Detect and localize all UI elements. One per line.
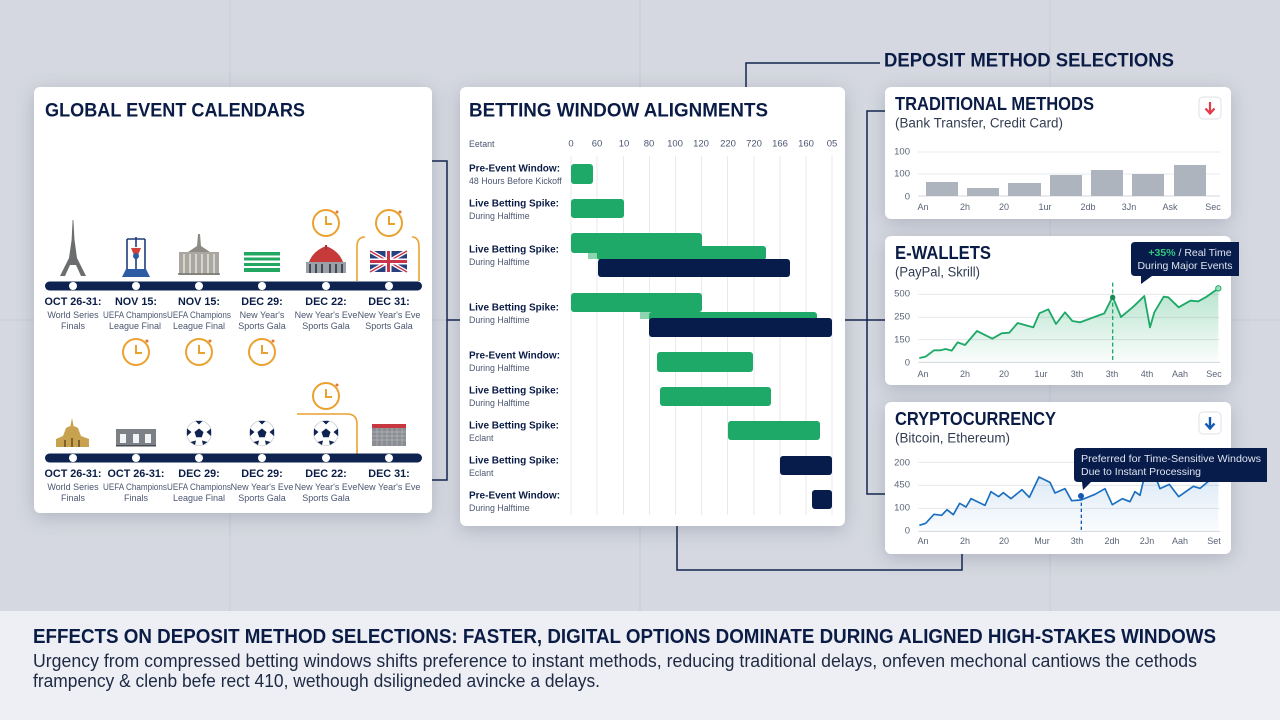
lower event labels: DEC 22: [305,468,347,480]
bar chart: traditional: 100 [894,146,910,158]
upper event labels [44,296,420,331]
upper event labels: League Final [173,321,225,331]
gantt row labels: 48 Hours Before Kickoff [469,176,562,186]
heading: cryptocurrency: CRYPTOCURRENCY [895,409,1056,429]
upper event labels: New Year's Eve [358,310,420,320]
gantt axis labels: 166 [772,138,788,150]
line chart: cryptocurrency: Aah [1172,536,1188,546]
upper event labels: UEFA Champions [167,310,231,320]
bar chart: traditional: Sec [1205,202,1221,212]
icon: columned hall [178,234,220,275]
gantt row labels: Pre-Event Window: [469,350,560,362]
bracket: highlighted lower event [297,414,357,454]
subtitle: cryptocurrency: (Bitcoin, Ethereum) [895,430,1010,446]
upper event labels: World Series [47,310,99,320]
panel: bottom summary band [0,611,1280,720]
line chart: cryptocurrency: 0 [905,526,910,536]
gantt bars [571,164,832,509]
line chart: e-wallets: 150 [894,334,910,346]
lower event labels: DEC 29: [241,468,283,480]
lower event labels: UEFA Champions [167,482,231,492]
gantt axis labels: 160 [798,138,814,150]
bar chart: traditional: 2h [960,202,970,212]
timeline: upper [45,282,422,290]
bar chart: traditional: 1ur [1038,202,1052,212]
connector: betting windows to cryptocurrency [677,526,962,570]
lower event labels: Sports Gala [238,493,286,503]
icon: trophy stand [122,237,150,277]
summary body text [33,651,1197,691]
upper event labels: Sports Gala [302,321,350,331]
lower event labels: OCT 26-31: [108,468,164,480]
gantt row labels: During Halftime [469,257,530,267]
summary body text: frampency & clenb befe rect 410, wethough dsiligneded avincke a delays. [33,671,600,691]
icons: soccer balls [186,420,338,446]
gantt axis labels: 0 [568,138,574,150]
icon: blue down arrow [1199,412,1221,434]
subtitle: traditional: (Bank Transfer, Credit Card) [895,116,1063,130]
line chart: e-wallets: 20 [999,369,1009,379]
gantt axis labels [469,138,837,150]
heading: global event calendars: GLOBAL EVENT CALENDARS [45,100,305,122]
line chart: e-wallets [894,283,1222,379]
summary heading: EFFECTS ON DEPOSIT METHOD SELECTIONS: FASTER, DIGITAL OPTIONS DOMINATE DURING ALIGNED HIGH-STAKES WINDOWS [33,626,1216,648]
line chart: e-wallets: 0 [905,358,910,368]
gantt row labels: During Halftime [469,211,530,221]
line chart: cryptocurrency: 200 [894,458,910,468]
lower event labels: Finals [124,493,148,503]
icon: red dome building [306,245,346,273]
gantt row labels: Pre-Event Window: [469,164,560,174]
upper event labels: NOV 15: [178,296,220,308]
gantt axis labels: 60 [592,138,602,150]
connector: betting windows to deposit cards [845,111,885,494]
bar chart: traditional: 0 [905,192,910,202]
icon: red down arrow [1199,97,1221,119]
clocks: middle row [123,339,275,365]
gantt row labels: Live Betting Spike: [469,198,559,210]
callout: preferred for time-sensitive windows [1074,448,1267,490]
subtitle: e-wallets: (PayPal, Skrill) [895,264,980,280]
bar chart: traditional: 2db [1080,202,1096,212]
line chart: e-wallets: Aah [1172,369,1188,379]
gantt axis labels: 720 [746,138,762,150]
lower event labels: League Final [173,493,225,503]
line chart: cryptocurrency: 2dh [1104,536,1120,546]
line chart: cryptocurrency [894,458,1221,546]
upper event labels: Finals [61,321,85,331]
panel: traditional methods [885,87,1231,219]
summary body text: Urgency from compressed betting windows shifts preference to instant methods, reducing traditional delays, onfeven mechonal cantiows the cethods [33,651,1197,671]
panel: e-wallets [885,236,1239,385]
icon: eiffel tower [60,220,86,276]
gantt row labels: Live Betting Spike: [469,456,559,466]
upper event labels: OCT 26-31: [44,296,102,308]
upper event labels: New Year's Eve [295,310,357,320]
gantt row labels: Eclant [469,433,494,443]
line chart: cryptocurrency: 3th [1071,536,1083,546]
bracket: highlighted upper event [357,237,419,281]
upper event labels: NOV 15: [115,296,157,308]
line chart: e-wallets: An [917,369,929,379]
gantt row labels [469,164,562,513]
gantt row labels: Pre-Event Window: [469,490,560,502]
upper event labels: DEC 29: [241,296,283,308]
upper event labels: League Final [109,321,161,331]
lower event labels [44,468,420,503]
gantt axis labels: 80 [644,138,654,150]
connector: betting windows to heading [746,63,880,87]
heading: e-wallets: E-WALLETS [895,243,991,263]
callout: +35% real time: During Major Events [1137,260,1233,272]
gantt axis labels: Eetant [469,139,495,149]
lower event labels: OCT 26-31: [44,468,102,480]
gantt row labels: During Halftime [469,503,530,513]
bar chart: traditional: Ask [1162,202,1178,212]
gantt axis labels: 120 [693,138,709,150]
line chart: e-wallets: 2h [960,369,970,379]
bar chart: traditional: An [917,202,929,212]
lower event labels: DEC 31: [368,468,410,480]
lower event labels: Finals [61,493,85,503]
line chart: e-wallets: 1ur [1034,369,1048,379]
panel: global event calendars [34,87,432,513]
upper event labels: Sports Gala [365,321,413,331]
line chart: e-wallets: 500 [894,288,910,300]
icon: union jack flag [370,251,407,272]
lower event labels: World Series [47,482,99,492]
line chart: cryptocurrency: 100 [894,502,910,514]
lower event labels: DEC 29: [178,468,220,480]
upper event labels: UEFA Champions [103,310,167,320]
lower event labels: New Year's Eve [358,482,420,492]
gantt row labels: During Halftime [469,363,530,373]
line chart: cryptocurrency: 2h [960,536,970,546]
icon: grey stadium facade [116,429,156,446]
gantt row labels: Live Betting Spike: [469,244,559,256]
section heading: deposit method selections: DEPOSIT METHOD SELECTIONS [884,50,1174,72]
callout: preferred for time-sensitive windows: Preferred for Time-Sensitive Windows [1081,453,1261,465]
icon: golden domed palace [56,418,89,447]
bar chart: traditional: 100 [894,168,910,180]
icon: green stripes [244,252,280,272]
gantt axis labels: 05 [827,138,837,150]
clock: lower row [313,383,339,409]
connector: calendars to betting windows [432,161,460,480]
callout: preferred for time-sensitive windows: Due to Instant Processing [1081,466,1201,478]
upper event labels: DEC 31: [368,296,410,308]
line chart: e-wallets: 250 [894,312,910,322]
panel: cryptocurrency [885,402,1267,554]
heading: betting window alignments: BETTING WINDOW ALIGNMENTS [469,100,768,122]
lower event labels: UEFA Champions [103,482,167,492]
line chart: cryptocurrency: 450 [894,480,910,490]
gantt axis labels: 10 [619,138,629,150]
line chart: cryptocurrency: Set [1207,536,1221,546]
bar chart: traditional: 20 [999,202,1009,212]
gantt row labels: Live Betting Spike: [469,386,559,396]
clocks: upper row [313,210,402,236]
panel: betting window alignments [460,87,845,526]
heading: traditional methods: TRADITIONAL METHODS [895,94,1094,114]
gantt row labels: Live Betting Spike: [469,420,559,432]
gantt row labels: During Halftime [469,398,530,408]
lower event labels: New Year's Eve [231,482,293,492]
gantt axis labels: 100 [667,138,683,150]
line chart: e-wallets: Sec [1206,369,1222,379]
line chart: e-wallets: 3th [1071,369,1083,379]
bar chart: traditional [894,146,1221,212]
gantt axis labels: 220 [720,138,736,150]
upper event labels: DEC 22: [305,296,347,308]
gantt row labels: Eclant [469,468,494,478]
lower event labels: New Year's Eve [295,482,357,492]
upper event labels: New Year's [240,310,285,320]
timeline: lower [45,454,422,462]
line chart: cryptocurrency: 2Jn [1140,536,1154,546]
line chart: cryptocurrency: Mur [1034,536,1050,546]
line chart: cryptocurrency: An [917,536,929,546]
line chart: e-wallets: 4th [1141,369,1153,379]
line chart: cryptocurrency: 20 [999,536,1009,546]
gantt row labels: During Halftime [469,315,530,325]
line chart: e-wallets: 3th [1106,369,1118,379]
bar chart: traditional: 3Jn [1122,202,1136,212]
upper event labels: Sports Gala [238,321,286,331]
lower event labels: Sports Gala [302,493,350,503]
icon: calendar grid [372,424,406,446]
callout: +35% real time: +35% / Real Time [1148,247,1232,259]
gantt row labels: Live Betting Spike: [469,302,559,314]
callout: +35% real time [1131,242,1239,284]
